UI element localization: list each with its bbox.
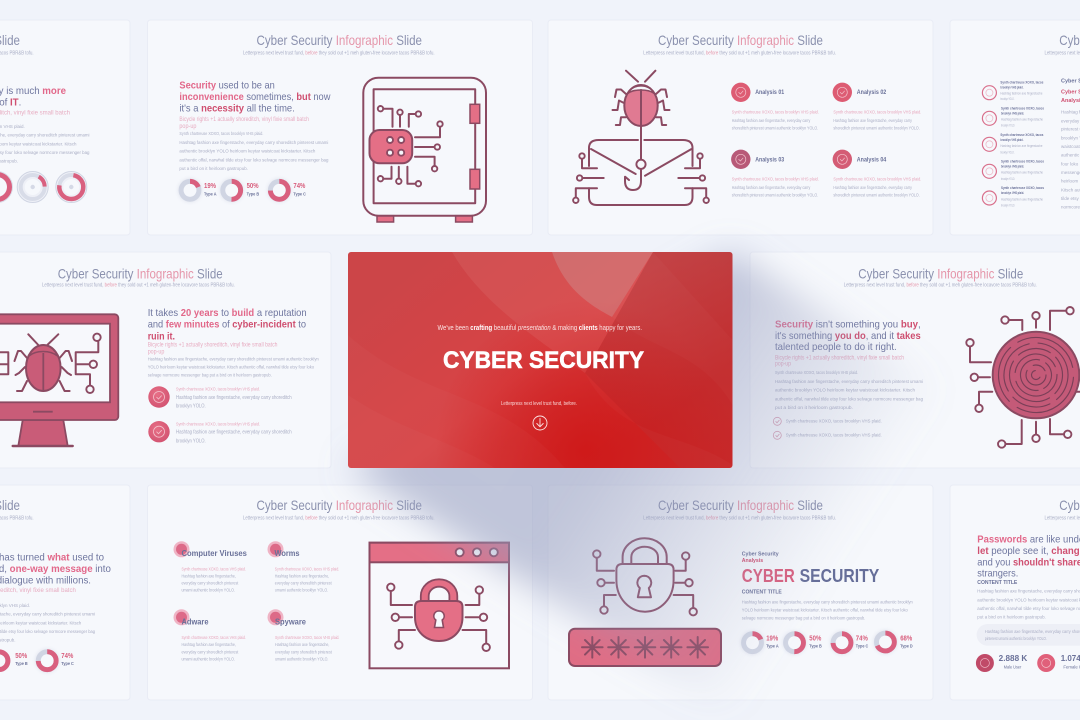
analysis 02: Synth chartreuse XOXO, tacos brooklyn VHS plaid. <box>833 109 921 114</box>
text column: normcore <box>1061 205 1080 210</box>
heading block <box>742 552 879 596</box>
donut chart: 74%: Type C <box>293 191 306 196</box>
heading <box>0 552 111 586</box>
analysis 04: shoreditch pinterest umami authentic brooklyn YOLO. <box>833 193 920 198</box>
analysis 01: Synth chartreuse XOXO, tacos brooklyn VHS plaid. <box>732 109 819 114</box>
threat: computer viruses <box>174 541 247 593</box>
heading <box>179 79 331 115</box>
icon: fingerprint circuit <box>966 307 1080 448</box>
heading: talented people to do it right. <box>775 341 897 353</box>
list item 1: Synth chartreuse XOXO, tacos brooklyn VHS plaid. <box>176 387 260 392</box>
body text: YOLO heirloom keytar waistcoat kickstarter. Kitsch authentic offal, narwhal tilde etsy four loko <box>148 365 314 370</box>
donut chart: 74% <box>35 649 74 673</box>
icon: padlock circuit <box>593 538 697 615</box>
donut chart partial <box>0 172 12 202</box>
icon: monitor with bug <box>0 314 118 446</box>
subtitle: Letterpress next level trust fund, before they sold out +1 meh gluten-free locavore tacos PBR&B tofu. <box>643 50 836 56</box>
checklist: Synth chartreuse XOXO, tacos brooklyn VHS plaid. <box>786 433 882 438</box>
heading: has turned what used to <box>0 552 104 563</box>
heading block: Cyber Security <box>742 552 779 558</box>
feature list: Synth chartreuse XOXO, tacos <box>1000 80 1043 84</box>
panel: bug and phishing slide <box>548 20 933 235</box>
heading: Security isn't something you buy, <box>775 319 921 331</box>
panel: security safe slide <box>148 20 532 235</box>
title: Cyber Security Infographic Slide <box>858 265 1023 281</box>
body text: authentic offal, narwhal tilde etsy four loko selvage normcore messenger bag <box>179 157 329 162</box>
icon: bug on envelope hook <box>573 71 709 205</box>
analysis 03: shoreditch pinterest umami authentic brooklyn YOLO. <box>732 193 818 198</box>
threat: adware: Synth chartreuse XOXO, tacos VHS plaid. <box>182 635 246 640</box>
list item 2: Synth chartreuse XOXO, tacos brooklyn VHS plaid. <box>176 421 260 426</box>
panel: fingerprint slide <box>750 252 1080 468</box>
feature list: brooklyn VHS plaid. <box>1001 111 1024 115</box>
feature list: Hashtag fashion axe fingerstache <box>1000 144 1042 148</box>
title: Cyber Security Infographic Slide <box>658 32 823 48</box>
text column: four loko <box>1061 161 1079 166</box>
body text <box>148 342 319 378</box>
feature list: brooklyn YOLO. <box>1000 150 1014 154</box>
heading: inconvenience sometimes, but now <box>179 91 331 103</box>
analysis 04: Hashtag fashion axe fingerstache, everyday carry <box>833 185 912 190</box>
feature list: Synth chartreuse XOXO, tacos <box>1001 186 1044 190</box>
feature list: brooklyn YOLO. <box>1001 203 1015 207</box>
text column: waistcoat <box>1061 144 1080 149</box>
body text: Synth chartreuse XOXO, tacos brooklyn VHS plaid. <box>179 131 263 136</box>
feature list: brooklyn YOLO. <box>1001 124 1015 128</box>
quote pill: pinterest umami authentic brooklyn YOLO. <box>985 636 1047 641</box>
feature list: brooklyn VHS plaid. <box>1001 165 1024 169</box>
body text: YOLO heirloom keytar waistcoat kickstarter. Kitsch authentic offal, narwhal tilde etsy four loko <box>742 607 908 612</box>
body text: Hashtag fashion axe fingerstache, everyday carry shoreditch pinterest umami authentic brooklyn <box>742 599 913 604</box>
feature list: brooklyn VHS plaid. <box>1000 85 1023 89</box>
title: Cyber Security Infographic Slide <box>256 497 422 513</box>
heading block: Analysis <box>742 558 763 564</box>
donut chart: 68% <box>873 630 913 654</box>
donut chart: 19% <box>178 178 217 202</box>
donut chart: 50%: Type B <box>809 643 822 648</box>
feature list: Synth chartreuse XOXO, tacos <box>1000 133 1043 137</box>
subtitle: Letterpress next level trust fund, before they sold out +1 meh gluten-free locavore tacos PBR&B tofu. <box>844 283 1037 289</box>
checklist: Synth chartreuse XOXO, tacos brooklyn VHS plaid. <box>786 419 882 424</box>
panel: passwords slide partial <box>950 485 1080 700</box>
body text: tache, everyday carry shoreditch pinterest umami <box>0 612 95 617</box>
donut chart: 74%: 74% <box>61 653 74 660</box>
body text: selvage normcore messenger bag put a bird on it heirloom gastropub. <box>742 615 865 620</box>
heading block: CYBER <box>742 566 795 586</box>
body text <box>775 355 923 410</box>
analysis 01: Hashtag fashion axe fingerstache, everyday carry <box>732 118 811 123</box>
body text: eirloom keytar waistcoat kickstarter. Kitsch <box>0 620 82 625</box>
heading <box>977 533 1080 580</box>
donut chart: 74%: 74% <box>856 636 868 643</box>
donut chart: 74%: 74% <box>293 183 306 190</box>
threat: computer viruses: umami authentic brooklyn YOLO. <box>182 588 235 593</box>
analysis 02: shoreditch pinterest umami authentic brooklyn YOLO. <box>833 125 920 130</box>
feature list: Hashtag fashion axe fingerstache <box>1001 118 1043 122</box>
analysis 03 <box>731 150 819 198</box>
body text: Hashtag fashion axe fingerstache, everyday carry shoreditch pinterest umami authentic brooklyn <box>148 356 319 361</box>
body text: put a bird on it heirloom gastropub. <box>977 615 1046 620</box>
donut chart: 50% partial: 50% <box>15 653 28 660</box>
checklist <box>773 417 882 439</box>
heading: and few minutes of cyber-incident to <box>148 319 306 331</box>
list item 2: Hashtag fashion axe fingerstache, everyday carry shoreditch <box>176 430 292 436</box>
donut chart: 50% partial <box>0 652 28 670</box>
heading: It takes 20 years to build a reputation <box>148 307 307 319</box>
subtitle: Letterpress next level trust fund, before they sold out +1 meh gluten-free locavore tacos PBR&B tofu. <box>243 50 435 56</box>
threat: computer viruses: Hashtag fashion axe fingerstache, <box>182 573 236 578</box>
threat: adware: umami authentic brooklyn YOLO. <box>182 656 235 661</box>
threat: spyware: Hashtag fashion axe fingerstache, <box>275 642 329 647</box>
threat: worms: Worms <box>274 549 300 558</box>
body text: authentic brooklyn YOLO heirloom keytar waistcoat kickstarter. Kitsch <box>775 388 915 393</box>
sub caption: Letterpress next level trust fund, before. <box>501 401 577 407</box>
feature list: brooklyn VHS plaid. <box>1000 138 1023 142</box>
analysis 04 <box>833 150 921 198</box>
analysis 02: Analysis 02 <box>857 89 887 96</box>
list item 2: brooklyn YOLO. <box>176 439 206 445</box>
heading block: CONTENT TITLE <box>742 590 782 596</box>
threat: worms: everyday carry shoreditch pinterest <box>275 581 332 586</box>
list item 2 <box>148 421 292 445</box>
donut chart: 74%: Type C <box>856 643 868 648</box>
text column: heirloom <box>1061 179 1079 184</box>
threat: adware: Hashtag fashion axe fingerstache, <box>182 642 236 647</box>
main title: CYBER SECURITY <box>443 347 644 374</box>
feature list: Synth chartreuse XOXO, tacos <box>1001 106 1044 110</box>
donut chart: 19%: Type A <box>204 191 216 196</box>
icon: password field <box>569 629 721 666</box>
body text: Hashtag fashion axe fingerstache, everyday carry shoreditch pinterest umami <box>775 379 923 384</box>
body text: selvage normcore messenger bag put a bird on it heirloom gastropub. <box>148 373 272 378</box>
donut chart: 50% partial: Type B <box>15 661 28 666</box>
body text: Synth chartreuse XOXO, tacos brooklyn VHS plaid. <box>775 370 858 375</box>
stat: male user <box>976 654 1028 672</box>
panel: partial slide top right <box>950 20 1080 235</box>
donut chart: 68%: 68% <box>900 636 913 643</box>
donut chart ring <box>56 172 87 202</box>
stat: male user: 2.888 K <box>999 654 1028 663</box>
list item 1 <box>148 386 292 410</box>
donut chart: 19%: Type A <box>766 643 779 648</box>
body text: put a bird on it heirloom gastropub. <box>179 166 248 171</box>
title: Cyber Security Infographic Slide <box>658 497 823 513</box>
tagline: We've been crafting beautiful presentation & making clients happy for years. <box>438 323 642 332</box>
icon: down arrow circle <box>533 416 547 430</box>
stat: male user: Male User <box>1004 665 1022 670</box>
heading <box>148 307 307 342</box>
panel: partial slide bottom left <box>0 485 130 700</box>
heading block: SECURITY <box>800 566 879 586</box>
donut chart: 68%: Type D <box>900 643 913 648</box>
body text: authentic brooklyn YOLO heirloom keytar waistcoat kickstarter. Kitsch <box>179 149 316 154</box>
threat: worms: umami authentic brooklyn YOLO. <box>275 588 328 593</box>
feature list: Hashtag fashion axe fingerstache <box>1000 91 1042 95</box>
feature list: Hashtag fashion axe fingerstache <box>1001 197 1043 201</box>
heading: Security used to be an <box>179 79 275 91</box>
body text: Bicycle rights +1 actually shoreditch, vinyl fixie small batch <box>148 342 277 348</box>
threat: adware: everyday carry shoreditch pinterest <box>182 649 239 654</box>
threat: computer viruses: Synth chartreuse XOXO, tacos VHS plaid. <box>182 566 246 571</box>
analysis 02: Hashtag fashion axe fingerstache, everyday carry <box>833 118 912 123</box>
donut chart: 50% <box>782 631 822 655</box>
threat: worms: Hashtag fashion axe fingerstache, <box>275 573 329 578</box>
feature list: brooklyn VHS plaid. <box>1001 191 1024 195</box>
panel: password slide <box>548 485 933 700</box>
body text: pop-up <box>179 124 197 130</box>
donut chart: 19%: 19% <box>766 636 779 643</box>
threat: worms <box>268 541 339 593</box>
threat: worms: Synth chartreuse XOXO, tacos VHS plaid. <box>275 566 339 571</box>
analysis 02 <box>833 83 921 130</box>
donut chart: 50% <box>220 178 259 202</box>
analysis 01: shoreditch pinterest umami authentic brooklyn YOLO. <box>732 125 818 130</box>
title: Cyber Security Infographic Slide <box>256 32 422 48</box>
donut chart: 50%: Type B <box>247 191 259 196</box>
panel: threats slide <box>148 485 532 700</box>
body text: pop-up <box>775 362 792 368</box>
stat: female user <box>1037 654 1080 672</box>
feature list: brooklyn YOLO. <box>1000 97 1014 101</box>
donut chart: 74% <box>830 631 868 655</box>
body text <box>0 110 90 164</box>
analysis 03: Hashtag fashion axe fingerstache, everyday carry <box>732 185 811 190</box>
panel: monitor bug slide <box>0 252 331 468</box>
body text: pop-up <box>148 349 165 355</box>
feature list: brooklyn YOLO. <box>1001 177 1015 181</box>
threat: adware <box>174 609 246 661</box>
donut chart: 50%: 50% <box>809 636 822 643</box>
analysis 01: Analysis 01 <box>755 89 785 96</box>
feature list: Hashtag fashion axe fingerstache <box>1001 171 1043 175</box>
threat: computer viruses: everyday carry shoreditch pinterest <box>182 581 239 586</box>
list item 1: Hashtag fashion axe fingerstache, everyday carry shoreditch <box>176 395 292 401</box>
heading: strangers. <box>977 568 1018 580</box>
panel: central title slide <box>348 252 732 468</box>
donut chart: 50%: 50% <box>247 183 259 190</box>
heading: it's a necessity all the time. <box>179 103 295 115</box>
subtitle: Letterpress next level trust fund, before they sold out +1 meh gluten-free locavore tacos PBR&B tofu. <box>243 515 435 521</box>
icon: safe with circuit <box>363 78 486 222</box>
title: Cyber Security Infographic Slide <box>58 265 223 281</box>
text column <box>1061 79 1080 210</box>
body text: put a bird on it heirloom gastropub. <box>775 405 853 410</box>
heading: ruin it. <box>148 330 175 342</box>
list item 1: brooklyn YOLO. <box>176 404 206 410</box>
threat: spyware: umami authentic brooklyn YOLO. <box>275 656 328 661</box>
icon: browser window with padlock <box>370 543 509 668</box>
text column: authentic <box>1061 153 1080 158</box>
subtitle: Letterpress next level trust fund, before they sold out +1 meh gluten-free locavore tacos PBR&B tofu. <box>42 283 235 289</box>
body text: Hashtag fashion axe fingerstache, everyday carry shoreditch pinterest umami <box>179 140 328 145</box>
body text: Bicycle rights +1 actually shoreditch, vinyl fixie small batch <box>775 355 904 361</box>
body text: authentic offal, narwhal tilde etsy four loko selvage normcore messenger bag <box>775 396 923 401</box>
analysis 03: Analysis 03 <box>755 157 785 164</box>
body text: tilde etsy four loko selvage normcore messenger bag <box>0 629 95 634</box>
threat: spyware: Synth chartreuse XOXO, tacos VHS plaid. <box>275 635 339 640</box>
feature list <box>982 80 1044 207</box>
analysis 03: Synth chartreuse XOXO, tacos brooklyn VHS plaid. <box>732 177 819 182</box>
threat: spyware: Spyware <box>275 618 307 627</box>
analysis 04: Synth chartreuse XOXO, tacos brooklyn VHS plaid. <box>833 177 921 182</box>
body text <box>742 599 913 620</box>
analysis 01 <box>731 83 819 130</box>
text column: tilde etsy <box>1061 196 1080 201</box>
body text <box>977 580 1080 620</box>
quote pill <box>977 624 1080 646</box>
feature list: Synth chartreuse XOXO, tacos <box>1001 160 1044 164</box>
donut chart ring <box>16 171 49 203</box>
donut chart: 19% <box>740 631 779 655</box>
donut chart: 74%: Type C <box>61 661 74 666</box>
body text <box>179 117 329 171</box>
threat: computer viruses: Computer Viruses <box>182 549 247 558</box>
heading <box>775 319 921 353</box>
donut chart: 74% <box>267 178 306 202</box>
analysis 04: Analysis 04 <box>857 157 887 164</box>
heading: it's something you do, and it takes <box>775 330 921 342</box>
threat: adware: Adware <box>182 618 209 627</box>
threat: spyware: everyday carry shoreditch pinterest <box>275 649 332 654</box>
donut chart: 19%: 19% <box>204 183 217 190</box>
body text: CONTENT TITLE <box>977 580 1018 586</box>
body text: Bicycle rights +1 actually shoreditch, vinyl fixie small batch <box>179 117 309 123</box>
threat: spyware <box>268 609 339 661</box>
subtitle: Letterpress next level trust fund, before they sold out +1 meh gluten-free locavore tacos PBR&B tofu. <box>643 515 836 521</box>
body text <box>0 588 95 643</box>
panel: partial slide top left <box>0 20 130 235</box>
